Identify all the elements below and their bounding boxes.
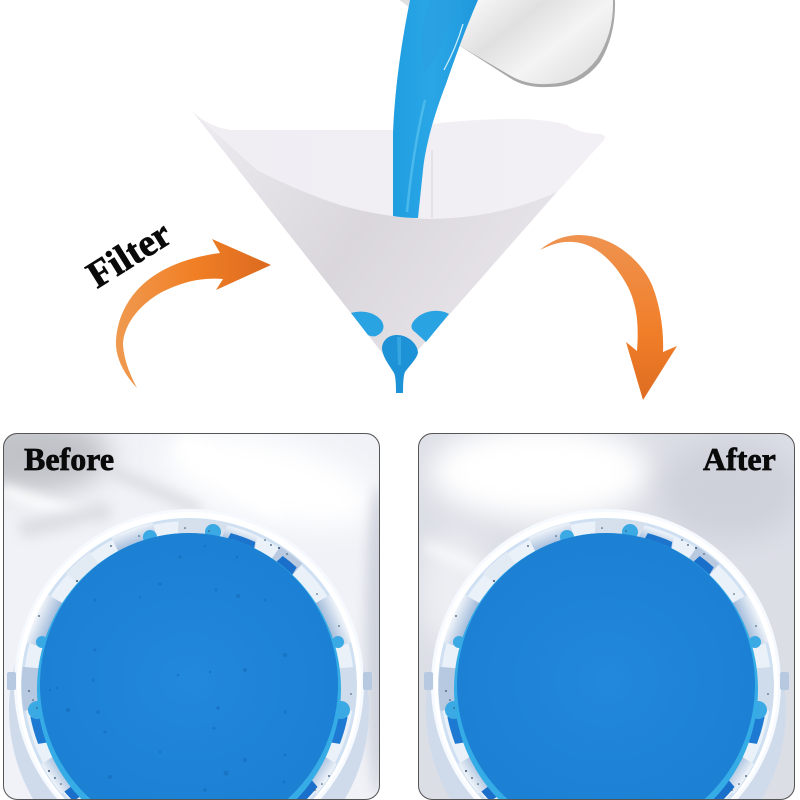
cone front wall	[192, 111, 557, 373]
paint stream	[393, 0, 478, 218]
icon: pouring cup	[400, 0, 615, 87]
panel: after	[418, 424, 800, 800]
panel: before	[0, 413, 390, 800]
arrow: out of filter	[540, 235, 677, 400]
label: Before: Before	[24, 441, 114, 477]
arrow: into filter	[116, 239, 271, 388]
paint drop left	[351, 312, 383, 336]
icon: filter cone	[192, 111, 605, 393]
cone back wall	[192, 111, 605, 240]
cone inner seam	[431, 150, 433, 218]
paint drop bottom with outflow	[382, 335, 418, 393]
label: After: After	[703, 441, 776, 477]
paint drop right	[412, 311, 449, 342]
bubbles on the unfiltered paint	[49, 545, 287, 792]
label: Filter: Filter	[80, 213, 179, 297]
